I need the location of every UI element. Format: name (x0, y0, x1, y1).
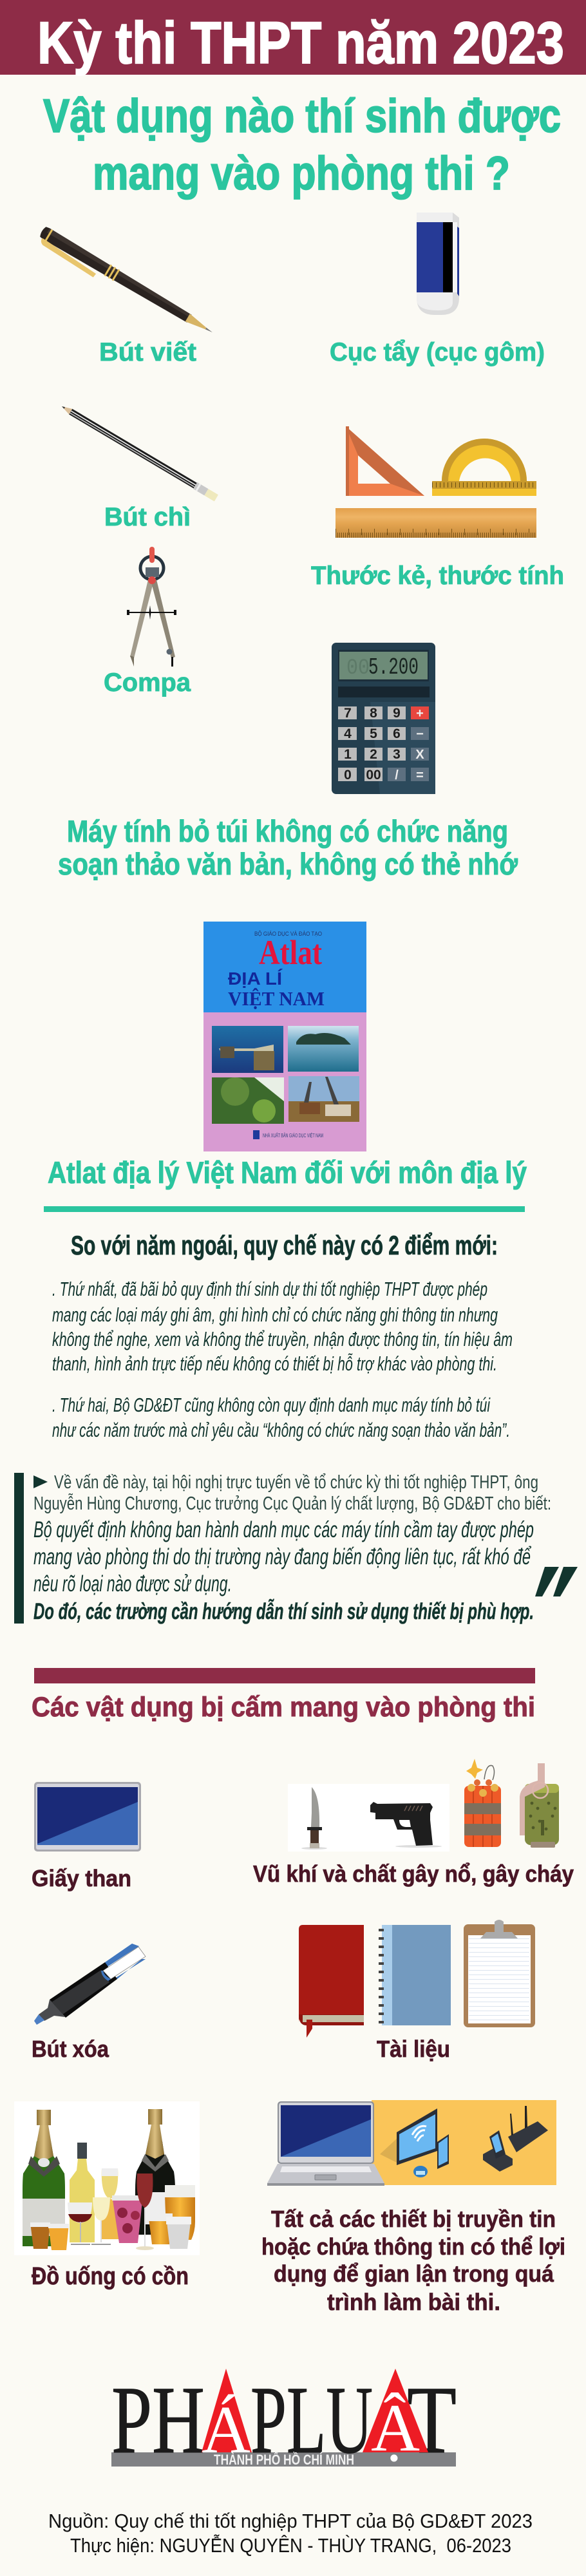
caption: devices (261, 2206, 565, 2315)
caption: devices: hoặc chứa thông tin có thể lợi (261, 2233, 565, 2260)
caption: calculator: Máy tính bỏ túi không có chức năng (67, 814, 508, 848)
logo: Pháp Luật: Ậ (371, 2390, 420, 2465)
icon: calculator: 6 (393, 726, 401, 741)
label: correction pen: Bút xóa (32, 2036, 109, 2062)
icon: calculator: 1 (344, 747, 352, 762)
icon: calculator: − (416, 727, 424, 741)
logo: Pháp Luật (111, 2367, 457, 2474)
icon: atlas book cover: ĐỊA LÍ (228, 969, 283, 989)
divider: maroon bar (34, 1668, 535, 1683)
icon: atlas book cover: NHÀ XUẤT BẢN GIÁO DỤC VIỆT NAM (263, 1132, 323, 1139)
text block: second new point (52, 1394, 510, 1441)
logo: Pháp Luật: PH (111, 2367, 205, 2474)
icon: calculator: 0 (344, 768, 352, 782)
label: pencil: Bút chì (104, 503, 191, 531)
footer: source and credits (48, 2510, 533, 2557)
icon: devices (267, 2100, 556, 2186)
icon: calculator: 3 (393, 747, 401, 762)
icon: calculator: 5 (370, 726, 377, 741)
icon: documents (299, 1920, 535, 2038)
label: alcoholic drinks: Đồ uống có cồn (32, 2263, 189, 2290)
label: documents: Tài liệu (377, 2036, 450, 2062)
icon: carbon paper (34, 1782, 141, 1852)
icon: weapons (288, 1759, 559, 1852)
icon: calculator: X (415, 748, 424, 762)
icon: closing quote mark (535, 1567, 578, 1596)
icon: calculator: 5.200 (368, 654, 419, 681)
caption: calculator (58, 814, 518, 881)
icon: pen (35, 225, 216, 344)
icon: calculator: / (395, 768, 399, 782)
caption: devices: Tất cả các thiết bị truyền tin (271, 2206, 556, 2232)
label: rulers: Thước kẻ, thước tính (311, 562, 564, 590)
caption: calculator: soạn thảo văn bản, không có thẻ nhớ (58, 847, 518, 881)
icon: calculator: 9 (393, 706, 401, 721)
icon: atlas book cover (203, 922, 366, 1151)
icon: alcoholic drinks (14, 2101, 200, 2255)
callout: official quote (14, 1472, 551, 1624)
icon: calculator: 7 (344, 706, 352, 721)
icon: eraser (417, 213, 459, 315)
logo: Pháp Luật: PLU (250, 2367, 373, 2474)
text block: first new point (52, 1278, 513, 1375)
divider: green rule (44, 1206, 525, 1212)
icon: calculator: 2 (370, 747, 377, 762)
callout: official quote: nêu rõ loại nào được sử dụng. (33, 1571, 232, 1596)
footer: source and credits: Nguồn: Quy chế thi tốt nghiệp THPT của Bộ GD&ĐT 2023 (48, 2510, 533, 2532)
icon: calculator: 00 (346, 656, 370, 681)
caption: devices: trình làm bài thi. (327, 2289, 500, 2315)
icon: calculator: = (416, 768, 424, 782)
icon: pencil (60, 403, 218, 502)
logo: Pháp Luật: THÀNH PHỐ HỒ CHÍ MINH (214, 2451, 354, 2468)
icon: compass (127, 547, 176, 667)
icon: calculator: 8 (370, 706, 377, 721)
heading: banned items: Các vật dụng bị cấm mang vào phòng thi (32, 1692, 535, 1723)
icon: atlas book cover: VIỆT NAM (228, 987, 325, 1010)
icon: correction pen (34, 1944, 146, 2025)
icon: atlas book cover: BỘ GIÁO DỤC VÀ ĐÀO TẠO (254, 931, 322, 938)
label: eraser: Cục tẩy (cục gôm) (330, 338, 545, 366)
icon: calculator: + (416, 706, 424, 721)
footer: source and credits: Thực hiện: NGUYỄN QUYÊN - THÙY TRANG, 06-2023 (70, 2534, 511, 2557)
icon: calculator (332, 643, 435, 794)
icon: calculator: 4 (344, 726, 352, 741)
label: compass: Compa (104, 668, 191, 697)
heading: allowed items: mang vào phòng thi ? (93, 147, 510, 200)
label: pen: Bút viết (99, 338, 196, 366)
heading: allowed items (43, 90, 561, 200)
logo: Pháp Luật: T (407, 2367, 457, 2474)
icon: atlas book cover: Atlat (259, 933, 322, 972)
logo: Pháp Luật: Á (202, 2392, 250, 2467)
icon: calculator: 00 (366, 768, 381, 782)
label: carbon paper: Giấy than (32, 1865, 131, 1891)
icon: rulers (336, 426, 536, 538)
caption: devices: dụng để gian lận trong quá (274, 2260, 554, 2287)
